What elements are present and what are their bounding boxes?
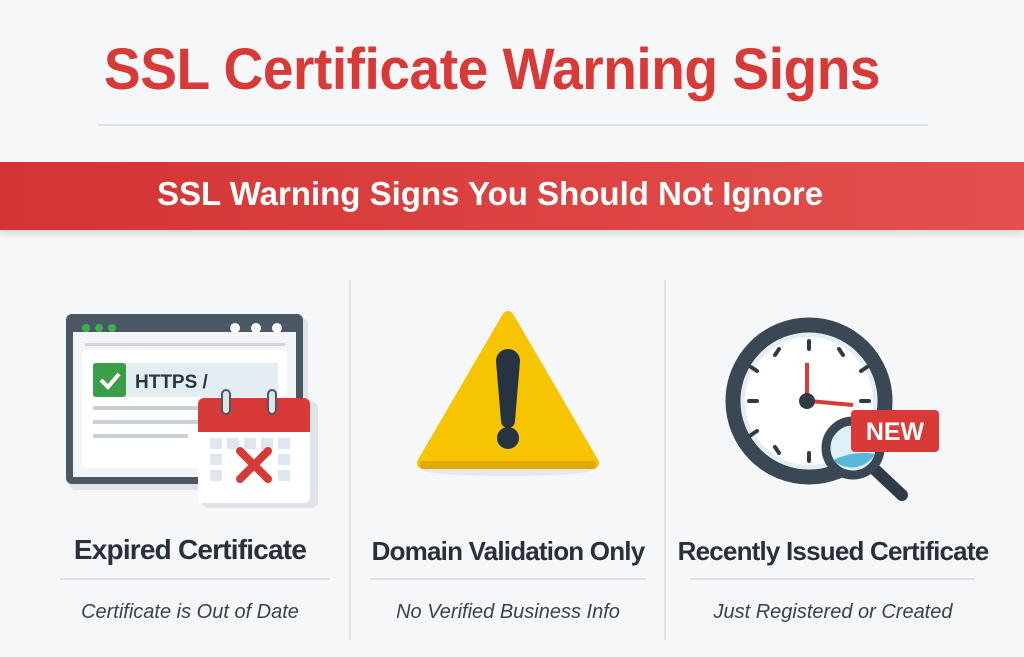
icon: clock with magnifier NEW bbox=[726, 318, 939, 501]
subtitle: domain: No Verified Business Info bbox=[396, 601, 620, 623]
subtitle: expired: Certificate is Out of Date bbox=[81, 601, 299, 623]
heading: recent: Recently Issued Certificate bbox=[678, 536, 988, 566]
icon: browser with expired calendar bbox=[66, 314, 318, 508]
banner: SSL Warning Signs You Should Not Ignore bbox=[157, 175, 823, 212]
icon: browser with expired calendar: HTTPS / bbox=[135, 372, 209, 393]
subtitle: recent: Just Registered or Created bbox=[713, 601, 952, 623]
title: SSL Certificate Warning Signs bbox=[104, 37, 880, 102]
heading: domain: Domain Validation Only bbox=[372, 536, 644, 566]
banner bbox=[0, 162, 1024, 230]
icon: clock with magnifier NEW: NEW bbox=[866, 418, 925, 446]
icon: warning triangle bbox=[417, 311, 599, 476]
heading: expired: Expired Certificate bbox=[74, 534, 306, 565]
